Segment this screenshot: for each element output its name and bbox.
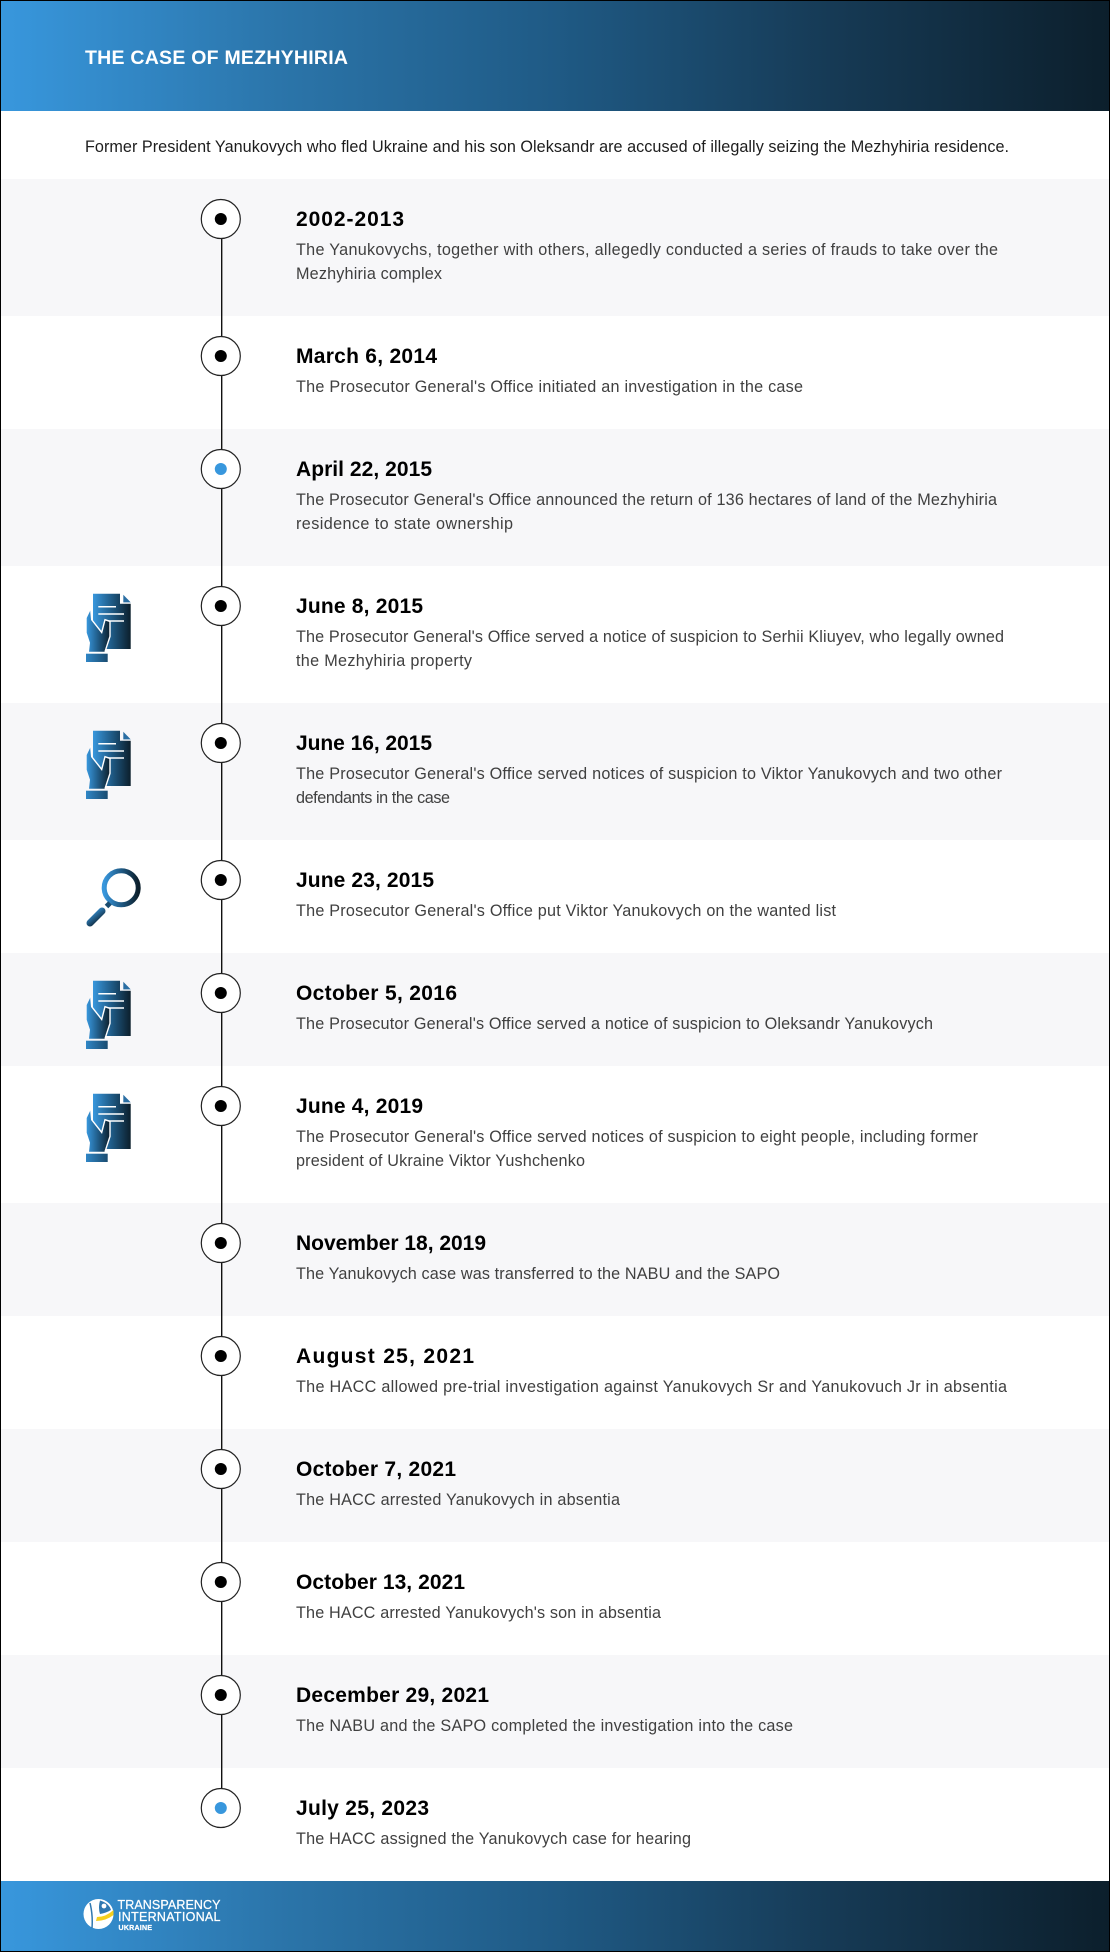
description: The Prosecutor General's Office announced the return of 136 hectares of land of the Mezhyhiria	[296, 491, 997, 509]
date: October 13, 2021	[296, 1571, 465, 1594]
intro text: Former President Yanukovych who fled Ukraine and his son Oleksandr are accused of illegally seizing the Mezhyhiria residence.	[85, 138, 1009, 156]
marker	[201, 1450, 240, 1488]
date: October 5, 2016	[296, 982, 457, 1005]
description	[296, 628, 1004, 670]
marker	[201, 974, 240, 1012]
icon: magnifying glass	[90, 871, 138, 923]
event: June 8, 2015	[86, 586, 1004, 670]
date: June 8, 2015	[296, 595, 423, 618]
description: The HACC allowed pre-trial investigation against Yanukovych Sr and Yanukovuch Jr in absentia	[296, 1378, 1007, 1396]
marker	[201, 450, 240, 488]
date: June 4, 2019	[296, 1095, 423, 1118]
description	[296, 1128, 979, 1170]
event: June 23, 2015	[90, 860, 836, 923]
event: November 18, 2019	[201, 1224, 780, 1283]
description: residence to state ownership	[296, 515, 513, 533]
event: December 29, 2021	[201, 1676, 793, 1735]
event: April 22, 2015	[201, 450, 997, 533]
logo wordmark	[118, 1898, 221, 1932]
logo mark	[84, 1899, 114, 1929]
description: defendants in the case	[296, 789, 450, 807]
date: 2002-2013	[296, 208, 404, 231]
event: August 25, 2021	[201, 1336, 1007, 1396]
date: October 7, 2021	[296, 1458, 456, 1481]
description: The Yanukovych case was transferred to the NABU and the SAPO	[296, 1265, 780, 1283]
event: July 25, 2023	[201, 1788, 691, 1848]
description: The Prosecutor General's Office served a notice of suspicion to Serhii Kliuyev, who legally owned	[296, 628, 1004, 646]
icon: document in hand	[86, 1094, 131, 1162]
date: June 16, 2015	[296, 732, 432, 755]
title: THE CASE OF MEZHYHIRIA	[85, 47, 348, 69]
icon: document in hand	[86, 594, 131, 662]
description: The HACC arrested Yanukovych's son in absentia	[296, 1604, 661, 1622]
description: The Prosecutor General's Office put Viktor Yanukovych on the wanted list	[296, 902, 836, 920]
date: December 29, 2021	[296, 1684, 489, 1707]
date: July 25, 2023	[296, 1797, 429, 1820]
logo wordmark: TRANSPARENCY	[118, 1898, 221, 1912]
event: March 6, 2014	[201, 336, 803, 396]
date: June 23, 2015	[296, 869, 434, 892]
description: The Prosecutor General's Office served notices of suspicion to eight people, including former	[296, 1128, 979, 1146]
description: The HACC arrested Yanukovych in absentia	[296, 1491, 620, 1509]
marker	[201, 586, 240, 626]
event: 2002-2013	[201, 200, 998, 283]
icon: document in hand	[86, 731, 131, 799]
description	[296, 491, 997, 533]
description: The Prosecutor General's Office initiated an investigation in the case	[296, 378, 803, 396]
marker	[201, 1562, 240, 1602]
event: October 5, 2016	[86, 974, 933, 1049]
marker	[201, 200, 240, 238]
date: April 22, 2015	[296, 458, 432, 481]
header banner	[1, 1, 1109, 111]
description: Mezhyhiria complex	[296, 265, 442, 283]
marker	[201, 1788, 240, 1828]
description	[296, 765, 1003, 807]
logo wordmark: UKRAINE	[118, 1925, 152, 1932]
marker	[201, 860, 240, 900]
logo wordmark: INTERNATIONAL	[118, 1910, 221, 1924]
event: October 7, 2021	[201, 1450, 620, 1509]
marker	[201, 336, 240, 376]
description: The Yanukovychs, together with others, allegedly conducted a series of frauds to take over the	[296, 241, 998, 259]
event: June 4, 2019	[86, 1086, 979, 1170]
date: August 25, 2021	[296, 1345, 474, 1368]
description: the Mezhyhiria property	[296, 652, 473, 670]
date: March 6, 2014	[296, 345, 437, 368]
marker	[201, 1224, 240, 1262]
description: The HACC assigned the Yanukovych case for hearing	[296, 1830, 691, 1848]
description: The Prosecutor General's Office served notices of suspicion to Viktor Yanukovych and two other	[296, 765, 1003, 783]
timeline axis	[221, 219, 223, 1808]
marker	[201, 724, 240, 762]
marker	[201, 1336, 240, 1376]
date: November 18, 2019	[296, 1232, 486, 1255]
description: The Prosecutor General's Office served a notice of suspicion to Oleksandr Yanukovych	[296, 1015, 933, 1033]
logo: Transparency International Ukraine	[84, 1898, 221, 1932]
marker	[201, 1676, 240, 1714]
description: The NABU and the SAPO completed the investigation into the case	[296, 1717, 793, 1735]
icon: document in hand	[86, 981, 131, 1049]
description: president of Ukraine Viktor Yushchenko	[296, 1152, 585, 1170]
event: October 13, 2021	[201, 1562, 661, 1622]
marker	[201, 1086, 240, 1126]
footer banner	[1, 1881, 1109, 1951]
event: June 16, 2015	[86, 724, 1003, 807]
description	[296, 241, 998, 283]
